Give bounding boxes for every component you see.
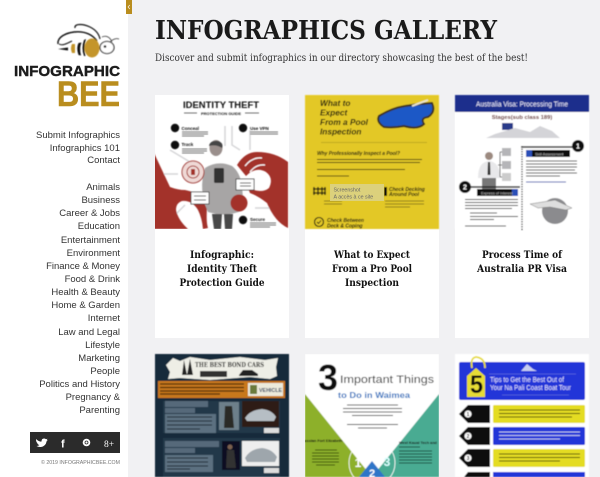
card title	[180, 249, 265, 289]
icon: facebook: f	[61, 438, 65, 450]
tooltip: screenshot	[330, 184, 384, 201]
copyright: © 2019 INFOGRAPHICBEE.COM	[41, 459, 120, 466]
logo wordmark: INFOGRAPHIC: INFOGRAPHIC	[14, 63, 120, 80]
banner: the best bond cars: THE BEST BOND CARS	[195, 362, 264, 369]
bond car panel two	[163, 438, 280, 477]
navigation: categories: Entertainment	[61, 235, 120, 246]
thumbnail: identity theft guide: PROTECTION GUIDE	[201, 111, 241, 116]
thumbnail: identity theft guide: Conceal	[182, 126, 199, 131]
header: five tips: Your Na Pali Coast Boat Tour	[490, 385, 572, 392]
tip row four	[464, 472, 585, 477]
intro text	[343, 405, 402, 428]
thumbnail: australia visa: Stages(sub class 189)	[492, 115, 552, 121]
navigation: categories: Business	[81, 195, 120, 206]
navigation: main links: Submit Infographics	[36, 130, 120, 141]
step numbers	[355, 455, 391, 477]
social icons bar	[30, 432, 120, 453]
panel: sidebar	[0, 0, 132, 477]
navigation: main links	[36, 130, 120, 166]
card title	[332, 249, 412, 289]
icon: google plus: 8+	[104, 440, 114, 450]
navigation: categories: Finance & Money	[46, 261, 120, 272]
card title	[476, 249, 567, 275]
navigation: categories: Education	[78, 221, 120, 232]
thumbnail: australia visa	[455, 95, 589, 230]
navigation: categories: Parenting	[79, 405, 120, 416]
thumbnail: pool inspection: Inspection	[320, 126, 362, 136]
navigation: categories: Law and Legal	[58, 327, 120, 338]
thumbnail: pool inspection: Around Pool	[388, 192, 420, 198]
thumbnail: pool inspection: Check Between	[327, 218, 364, 224]
navigation: categories	[39, 182, 121, 416]
thumbnail: pool inspection: Why Professionally Inspect a Pool?	[317, 151, 400, 157]
subheading: to do in Waimea: to Do in Waimea	[338, 391, 411, 400]
card title: Process Time of	[482, 249, 563, 261]
heading: important things: Important Things	[340, 374, 435, 386]
orange intro band: VEHICLE	[259, 388, 282, 394]
blue triangle section	[359, 461, 385, 477]
thumbnail: pool inspection: From a Pool	[320, 117, 369, 127]
circle outline	[348, 451, 396, 477]
large numeral 3: 3	[318, 357, 338, 398]
thumbnail: identity theft guide: IDENTITY THEFT	[183, 100, 259, 111]
card: pool inspection	[305, 95, 439, 338]
card title: Infographic:	[190, 249, 254, 261]
navigation: categories: Environment	[67, 248, 120, 259]
thumbnail: identity theft guide: Secure	[250, 217, 266, 222]
thumbnail: pool inspection: Expect	[320, 108, 348, 118]
thumbnail: australia visa: 1	[576, 144, 580, 150]
sidebar toggle tab	[126, 0, 132, 14]
navigation: categories: Marketing	[78, 353, 120, 364]
navigation: categories: Politics and History	[39, 379, 120, 390]
navigation: main links: Infographics 101	[50, 143, 120, 154]
card title: Inspection	[345, 277, 399, 289]
navigation: categories: People	[90, 366, 120, 377]
tooltip: screenshot: A accès à ce site	[334, 194, 373, 200]
step numbers: 3	[384, 455, 391, 469]
card: identity theft	[154, 95, 289, 338]
card: australia visa	[455, 95, 589, 338]
icon: bee	[58, 24, 119, 58]
navigation: categories: Home & Garden	[51, 300, 120, 311]
thumbnail: australia visa: Express of Interest	[481, 192, 514, 196]
thumbnail: identity theft guide: Track	[182, 142, 194, 147]
header: five tips: Tips to Get the Best Out of	[490, 377, 564, 384]
logo wordmark: BEE: BEE	[57, 75, 120, 114]
subtitle: Discover and submit infographics in our directory showcasing the best of the best!	[155, 52, 528, 64]
navigation: main links: Contact	[87, 155, 120, 166]
card: bond cars	[155, 354, 289, 477]
icon: twitter	[36, 438, 48, 447]
icon: pinterest	[83, 439, 90, 446]
card title: Australia PR Visa	[476, 263, 567, 275]
header: five tips	[459, 357, 585, 400]
card title: What to Expect	[333, 249, 410, 261]
navigation: categories: Internet	[88, 313, 120, 324]
card title: Protection Guide	[180, 277, 265, 289]
thumbnail: pool inspection	[305, 95, 439, 230]
navigation: categories: Lifestyle	[85, 340, 120, 351]
thumbnail: pool inspection: Deck & Coping	[327, 224, 363, 230]
card title: From a Pro Pool	[332, 263, 412, 275]
thumbnail: identity theft guide	[154, 100, 288, 229]
thumbnail: australia visa: Australia Visa: Processing Time	[476, 102, 568, 108]
card: things to do in Waimea	[302, 354, 439, 477]
title: INFOGRAPHICS GALLERY	[155, 16, 497, 46]
header: five tips: 5	[470, 371, 483, 399]
thumbnail: australia visa: Skill Assessment	[535, 152, 564, 156]
tip row one: 1	[467, 412, 470, 418]
navigation: categories: Animals	[86, 182, 120, 193]
thumbnail: pool inspection: Check Decking	[389, 187, 425, 193]
navigation: categories: Food & Drink	[65, 274, 120, 285]
bond car panel one	[163, 401, 280, 433]
thumbnail: australia visa: 2	[463, 184, 467, 192]
step numbers: 1	[355, 456, 362, 470]
navigation: categories: Pregnancy &	[66, 392, 121, 403]
tooltip: screenshot: Screenshot	[334, 188, 361, 194]
card: boat tour tips	[455, 354, 589, 477]
tip row three: 3	[467, 456, 470, 462]
green triangle section: Russian Fort Elizabeth	[302, 439, 343, 443]
teal triangle section: West Kauai Tech and	[399, 441, 438, 445]
logo: Infographic Bee	[14, 24, 120, 114]
thumbnail: pool inspection: What to	[320, 98, 350, 108]
tip row two: 2	[467, 434, 470, 440]
thumbnail: identity theft guide: Use VPN	[250, 126, 269, 131]
card title: Identity Theft	[187, 263, 257, 275]
navigation: categories: Health & Beauty	[51, 287, 120, 298]
navigation: categories: Career & Jobs	[59, 208, 120, 219]
